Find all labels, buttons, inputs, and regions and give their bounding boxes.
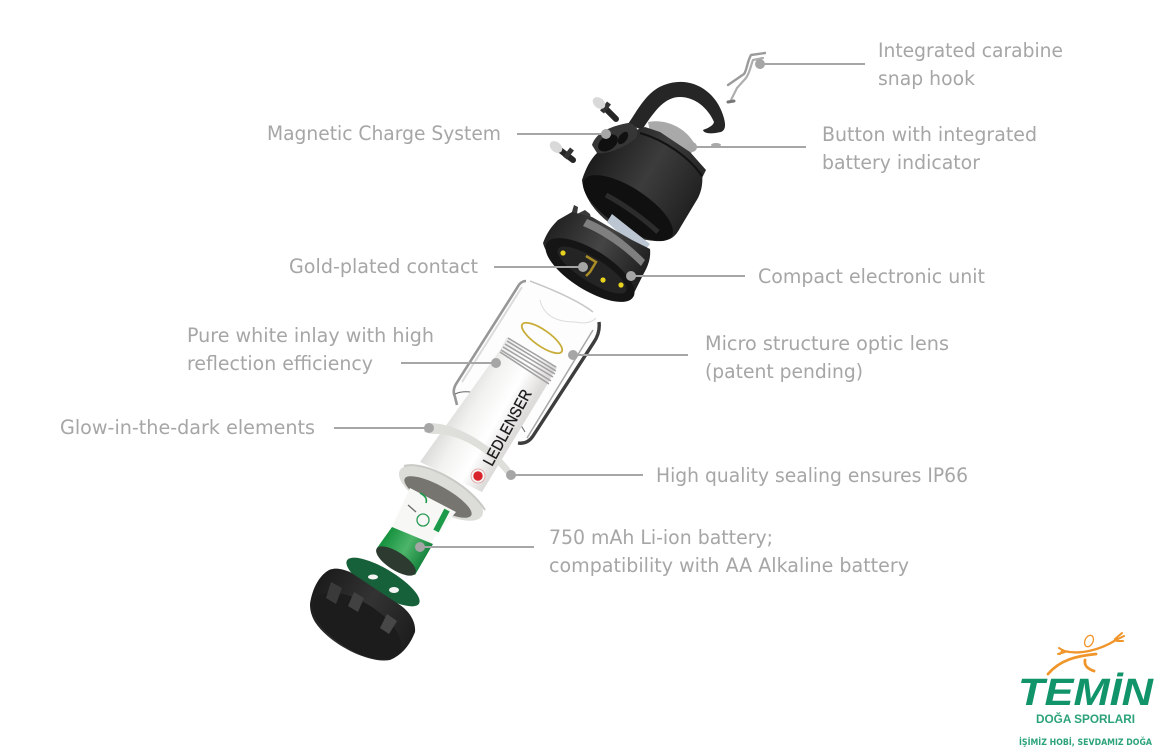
- callout: pure white inlay: Pure white inlay with high: [187, 324, 434, 347]
- electronic unit: [536, 205, 650, 314]
- callout: glow-in-the-dark elements: [60, 416, 434, 439]
- green disc: [340, 549, 426, 615]
- callout: micro structure optic lens: [568, 332, 949, 383]
- sealing flanges: [391, 423, 511, 532]
- logo subtitle: DOĞA SPORLARI: [1036, 713, 1135, 726]
- callout: compact electronic unit: [626, 265, 985, 288]
- white inlay body: [420, 318, 566, 492]
- logo wordmark: TEMİN: [1018, 672, 1155, 714]
- callout: gold-plated contact: Gold-plated contact: [289, 255, 478, 278]
- callout: battery: 750 mAh Li-ion battery;: [549, 526, 773, 549]
- callout: carabine snap hook: snap hook: [878, 67, 976, 90]
- handle: [628, 82, 725, 133]
- callout: button with battery indicator: [687, 123, 1037, 174]
- callout: battery: compatibility with AA Alkaline battery: [549, 554, 909, 577]
- callout: button with battery indicator: battery indicator: [822, 151, 981, 174]
- callout: gold-plated contact: [289, 255, 588, 278]
- logo figure: [1048, 633, 1124, 674]
- callout: carabine snap hook: Integrated carabine: [878, 39, 1063, 62]
- callout: pure white inlay: [187, 324, 501, 375]
- battery: [372, 488, 456, 581]
- callout: magnetic charge system: Magnetic Charge System: [267, 122, 501, 145]
- logo: Temin Doğa Sporları: [1018, 633, 1155, 748]
- callout: pure white inlay: reflection efficiency: [187, 352, 373, 375]
- callout: carabine snap hook: [755, 39, 1063, 90]
- callout: micro structure optic lens: Micro structure optic lens: [705, 332, 949, 355]
- bottom cap: [302, 569, 415, 673]
- callout: button with battery indicator: Button with integrated: [822, 123, 1037, 146]
- lantern exploded illustration: [302, 53, 765, 673]
- screws: [547, 95, 616, 160]
- optic lens: [454, 280, 599, 444]
- callout: micro structure optic lens: (patent pending): [705, 360, 863, 383]
- callout: battery: [415, 526, 909, 577]
- brand text and red button: LEDLENSER: [481, 387, 536, 469]
- carabine snap hook: [728, 53, 765, 102]
- brand text and red button: [471, 387, 536, 483]
- callout: glow-in-the-dark elements: Glow-in-the-dark elements: [60, 416, 315, 439]
- top cap: [573, 121, 721, 253]
- callout: compact electronic unit: Compact electronic unit: [758, 265, 985, 288]
- callout: sealing IP66: [506, 464, 968, 487]
- callout: sealing IP66: High quality sealing ensures IP66: [656, 464, 968, 487]
